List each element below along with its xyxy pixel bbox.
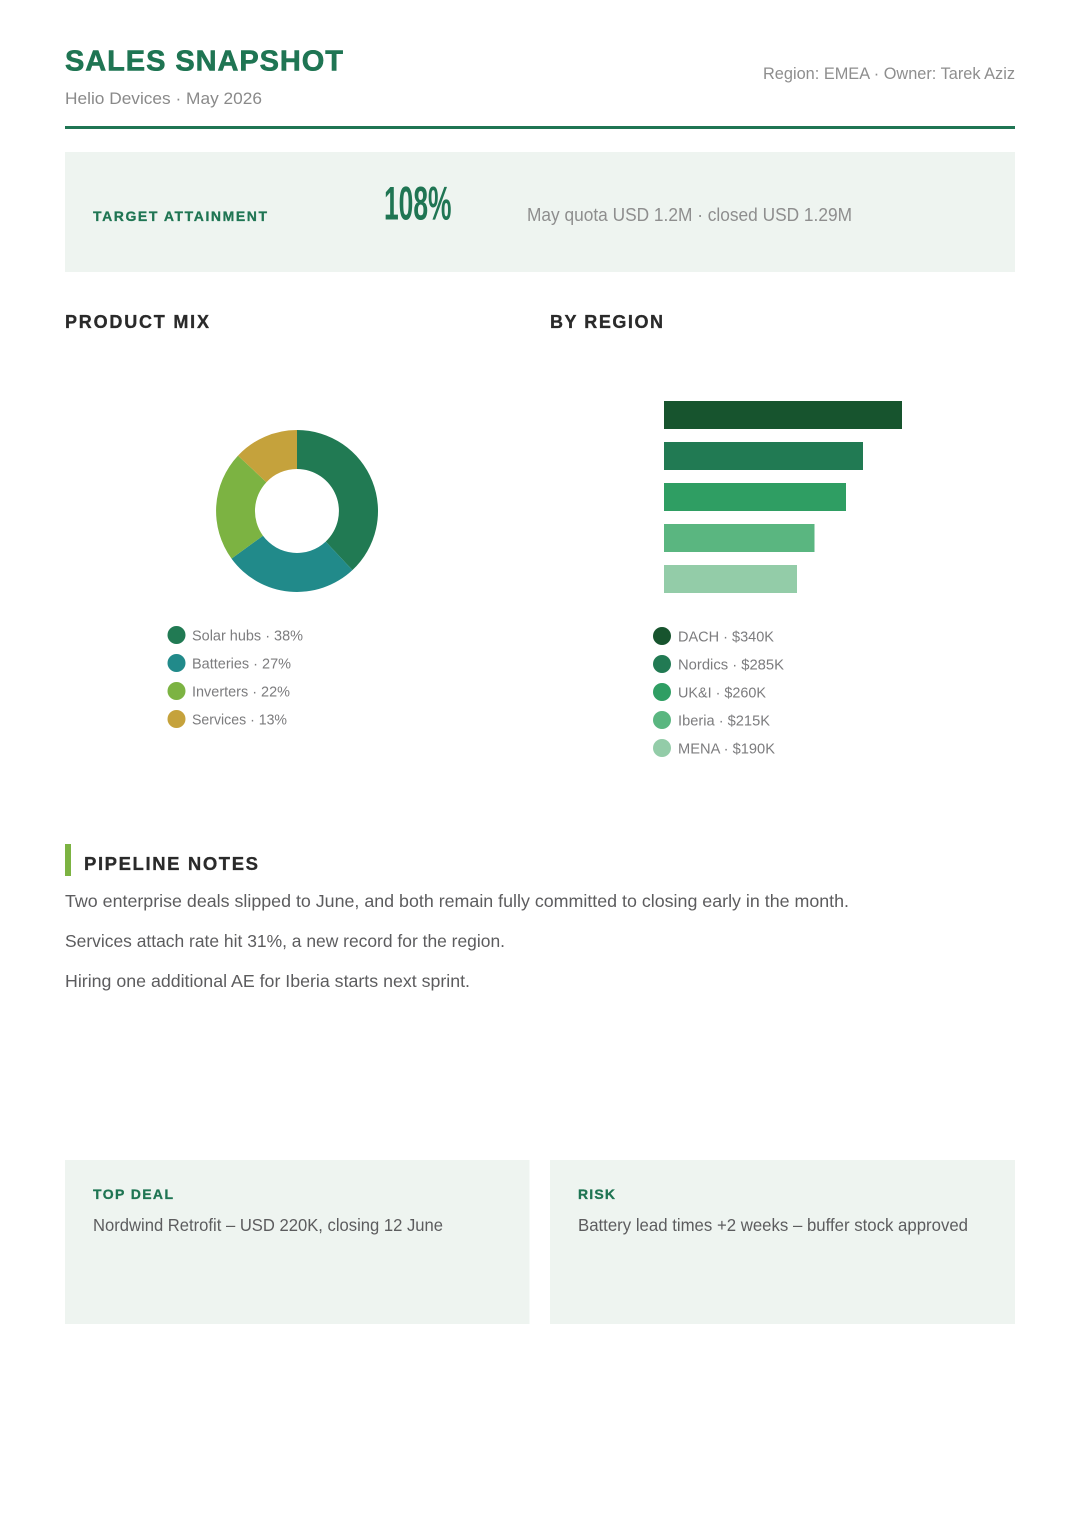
legend: by region — [653, 627, 784, 758]
legend: by region: UK&I · $260K — [678, 684, 766, 702]
risk label: RISK — [578, 1186, 615, 1202]
panel: pipeline notes — [65, 844, 849, 991]
KPI value: 108% — [384, 176, 452, 230]
legend: product mix: Solar hubs · 38% — [192, 628, 303, 644]
header — [65, 46, 1015, 129]
title: SALES SNAPSHOT — [65, 46, 343, 78]
accent bar — [65, 844, 71, 876]
legend: by region: MENA · $190K — [678, 740, 775, 758]
legend: by region: DACH · $340K — [678, 628, 774, 646]
top deal label: TOP DEAL — [93, 1186, 173, 1202]
region and owner: Region: EMEA · Owner: Tarek Aziz — [763, 65, 1015, 83]
KPI label: TARGET ATTAINMENT — [93, 208, 267, 224]
subtitle: Helio Devices · May 2026 — [65, 89, 262, 108]
legend: product mix: Inverters · 22% — [192, 684, 290, 700]
legend: by region: Iberia · $215K — [678, 712, 770, 730]
header rule — [65, 126, 1015, 129]
risk text: Battery lead times +2 weeks – buffer stock approved — [578, 1215, 968, 1235]
note 1: Two enterprise deals slipped to June, and both remain fully committed to closing early in the month. — [65, 891, 849, 911]
KPI detail: May quota USD 1.2M · closed USD 1.29M — [527, 205, 852, 225]
panel: top deal — [65, 1160, 530, 1324]
bar chart — [664, 401, 902, 593]
note 2: Services attach rate hit 31%, a new record for the region. — [65, 931, 505, 951]
legend: product mix: Batteries · 27% — [192, 656, 291, 672]
panel: product mix — [65, 312, 378, 728]
heading: pipeline notes: PIPELINE NOTES — [84, 853, 258, 874]
top deal text: Nordwind Retrofit – USD 220K, closing 12 June — [93, 1215, 443, 1235]
heading: by region: BY REGION — [550, 312, 663, 332]
legend: by region: Nordics · $285K — [678, 656, 784, 674]
panel: target attainment — [65, 152, 1015, 272]
legend: product mix — [168, 626, 303, 728]
heading: product mix: PRODUCT MIX — [65, 312, 209, 332]
legend: product mix: Services · 13% — [192, 712, 287, 728]
note 3: Hiring one additional AE for Iberia starts next sprint. — [65, 971, 470, 991]
donut chart — [216, 430, 378, 592]
panel: risk — [550, 1160, 1015, 1324]
panel: by region — [550, 312, 902, 758]
